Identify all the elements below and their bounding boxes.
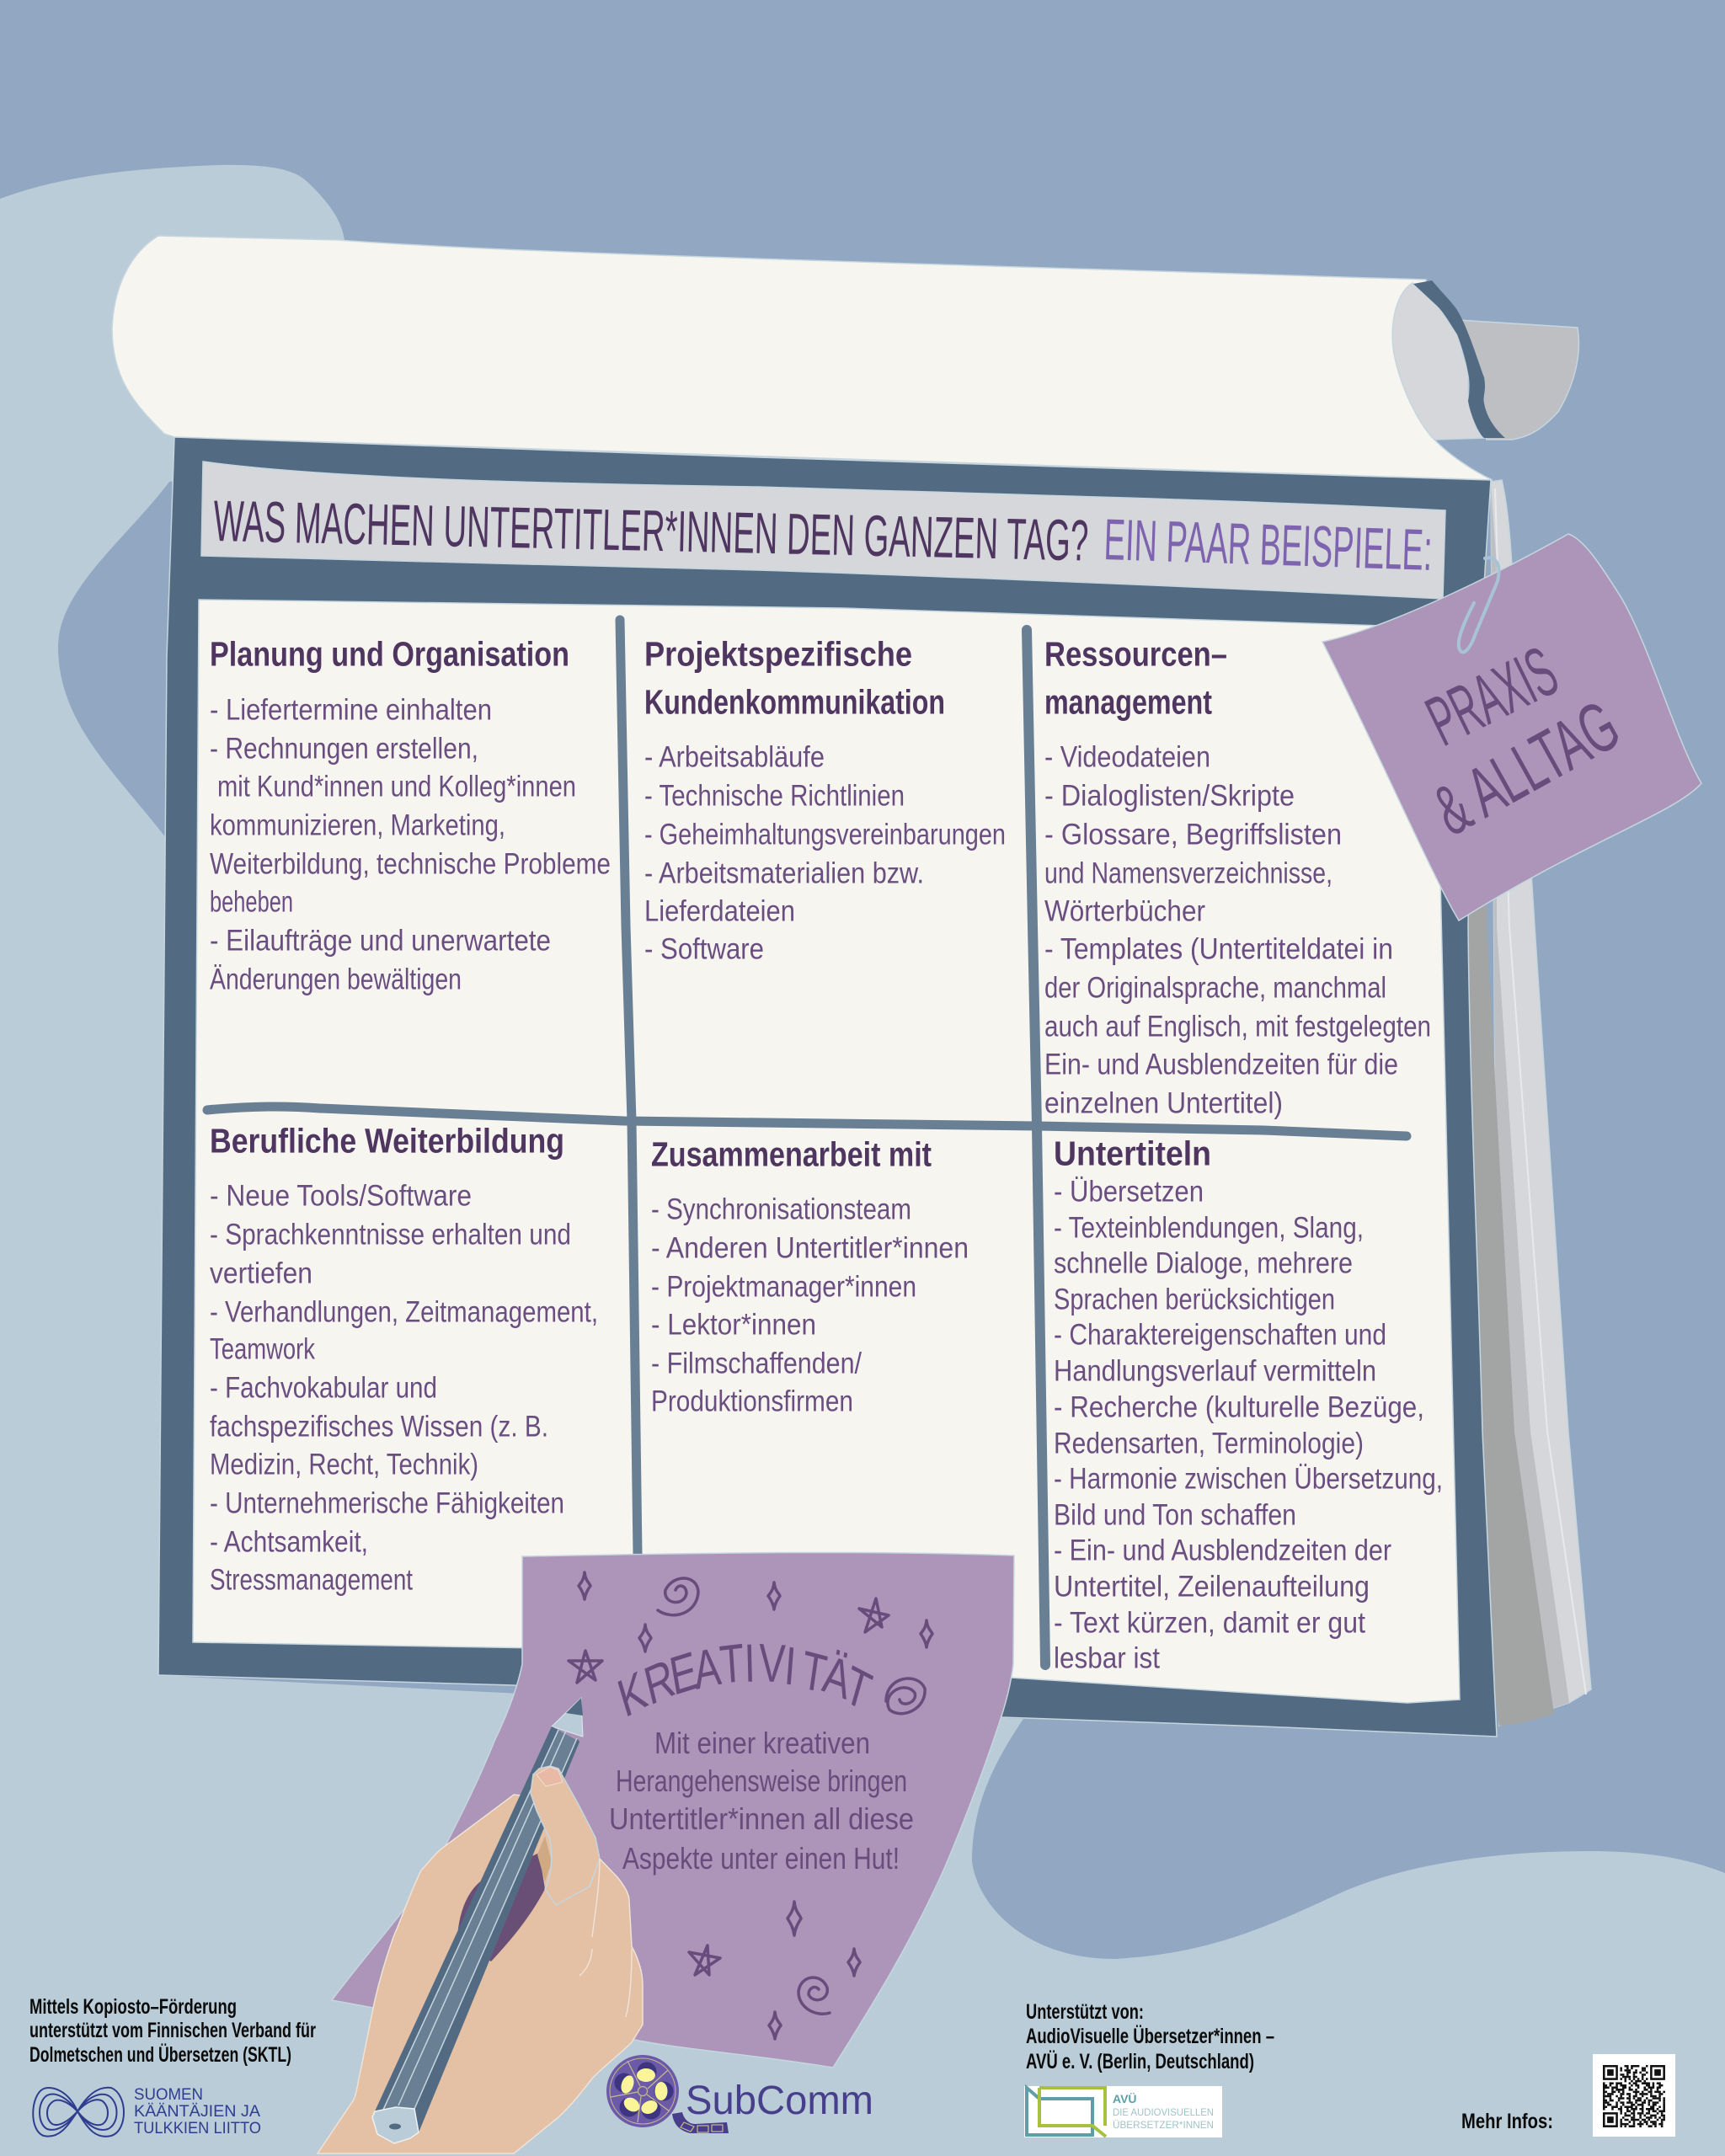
panel: Berufliche Weiterbildung: - Neue Tools/Software xyxy=(210,1179,472,1213)
panel: Zusammenarbeit mit: - Anderen Untertitler*innen xyxy=(651,1231,969,1265)
panel: Ressourcenmanagement: und Namensverzeichnisse, xyxy=(1044,857,1332,889)
panel: Berufliche Weiterbildung: vertiefen xyxy=(210,1257,312,1290)
footer: support note: AudioVisuelle Übersetzer*innen – xyxy=(1026,2024,1274,2048)
panel: Projektspezifische Kundenkommunikation: - Software xyxy=(644,933,764,965)
logo: AVÜ: DIE AUDIOVISUELLEN xyxy=(1113,2106,1214,2118)
illustration: hand with pencil xyxy=(318,1698,643,2153)
thumb xyxy=(531,1766,600,1905)
footer: support note xyxy=(1026,2000,1274,2073)
panel: Untertiteln: schnelle Dialoge, mehrere xyxy=(1054,1246,1353,1280)
panel: Untertiteln: - Harmonie zwischen Übersetzung, xyxy=(1054,1462,1443,1496)
skin shadow xyxy=(537,1836,552,1881)
panel: Untertiteln: Redensarten, Terminologie) xyxy=(1054,1427,1364,1460)
panel: Untertiteln: - Ein- und Ausblendzeiten der xyxy=(1054,1534,1391,1566)
panel: Zusammenarbeit mit: - Lektor*innen xyxy=(651,1309,816,1341)
panel: Projektspezifische Kundenkommunikation: Projektspezifische xyxy=(644,635,912,674)
note text: Aspekte unter einen Hut! xyxy=(622,1841,900,1876)
sticky note: Praxis und Alltag xyxy=(1322,534,1701,921)
footer: support note: AVÜ e. V. (Berlin, Deutschland) xyxy=(1026,2049,1254,2073)
panel: Berufliche Weiterbildung: - Sprachkenntnisse erhalten und xyxy=(210,1218,571,1251)
panel: Ressourcenmanagement: der Originalsprache, manchmal xyxy=(1044,972,1386,1004)
panel: Ressourcenmanagement: - Dialoglisten/Skripte xyxy=(1044,780,1295,812)
panel: Berufliche Weiterbildung: Stressmanagement xyxy=(210,1563,413,1597)
footer: funding note: unterstützt vom Finnischen Verband für xyxy=(29,2019,316,2042)
panel: Planung und Organisation xyxy=(210,635,611,995)
panel: Untertiteln: Sprachen berücksichtigen xyxy=(1054,1283,1335,1315)
hand xyxy=(318,1795,643,2153)
panel: Zusammenarbeit mit: - Projektmanager*innen xyxy=(651,1270,916,1304)
panel: Planung und Organisation: kommunizieren, Marketing, xyxy=(210,808,505,842)
panel: Planung und Organisation: - Rechnungen erstellen, xyxy=(210,733,478,765)
icon: infinity knot xyxy=(33,2088,124,2137)
inner page xyxy=(193,600,1460,1703)
panel: Berufliche Weiterbildung: - Achtsamkeit, xyxy=(210,1526,368,1558)
panel: Planung und Organisation: beheben xyxy=(210,886,293,918)
panel: Projektspezifische Kundenkommunikation xyxy=(644,635,1006,965)
logo: SubComm xyxy=(606,2055,873,2133)
roll band xyxy=(1413,280,1505,438)
panel: Zusammenarbeit mit: Produktionsfirmen xyxy=(651,1385,853,1418)
note text: Untertitler*innen all diese xyxy=(609,1801,914,1836)
heading: Kreativität arc: KREATIVITÄT xyxy=(611,1632,878,1729)
panel: Planung und Organisation: mit Kund*innen und Kolleg*innen xyxy=(217,770,576,803)
panel: Projektspezifische Kundenkommunikation: Lieferdateien xyxy=(644,894,795,928)
panel: Zusammenarbeit mit: - Synchronisationsteam xyxy=(651,1193,911,1226)
panel: Ressourcenmanagement: Ein- und Ausblendzeiten für die xyxy=(1044,1048,1398,1081)
sticky note text xyxy=(1415,631,1632,851)
panel: Projektspezifische Kundenkommunikation: - Technische Richtlinien xyxy=(644,780,905,812)
panel: Berufliche Weiterbildung: Berufliche Weiterbildung xyxy=(210,1122,564,1161)
icon: doodles xyxy=(569,1572,932,2039)
finger gap xyxy=(457,1853,545,1961)
paper roll xyxy=(112,236,1578,480)
panel: Ressourcenmanagement: Ressourcen– xyxy=(1044,635,1227,674)
footer: support note: Unterstützt von: xyxy=(1026,2000,1144,2024)
panel: Berufliche Weiterbildung: fachspezifisches Wissen (z. B. xyxy=(210,1410,548,1444)
footer: funding note: Mittels Kopiosto–Förderung xyxy=(29,1995,237,2019)
panel: Untertiteln: - Übersetzen xyxy=(1054,1176,1204,1208)
logo: AVÜ xyxy=(1024,2086,1222,2137)
thumbnail xyxy=(537,1767,563,1786)
panel: Ressourcenmanagement: einzelnen Untertitel) xyxy=(1044,1086,1283,1120)
roll cone xyxy=(1459,320,1578,440)
QR code xyxy=(1593,2054,1675,2137)
panel: Projektspezifische Kundenkommunikation: Kundenkommunikation xyxy=(644,682,945,721)
logo: SKTL: KÄÄNTÄJIEN JA xyxy=(134,2103,260,2121)
icon: paperclip xyxy=(1459,558,1499,653)
pencil xyxy=(372,1698,583,2143)
panel: Ressourcenmanagement: Wörterbücher xyxy=(1044,894,1205,928)
panel: Berufliche Weiterbildung xyxy=(210,1122,598,1597)
panel: Zusammenarbeit mit: - Filmschaffenden/ xyxy=(651,1348,862,1380)
panel: Ressourcenmanagement: - Templates (Untertiteldatei in xyxy=(1044,933,1393,965)
panel: Ressourcenmanagement: - Videodateien xyxy=(1044,741,1210,773)
panel: Planung und Organisation: - Eilaufträge und unerwartete xyxy=(210,925,551,957)
panel: Zusammenarbeit mit: Zusammenarbeit mit xyxy=(651,1135,932,1174)
panel: Berufliche Weiterbildung: - Fachvokabular und xyxy=(210,1371,437,1405)
icon: film strip xyxy=(672,2112,729,2133)
panel: Berufliche Weiterbildung: - Verhandlungen, Zeitmanagement, xyxy=(210,1295,598,1329)
panel: Planung und Organisation: - Liefertermine einhalten xyxy=(210,694,492,726)
notebook back pages xyxy=(1432,480,1591,1726)
notebook frame xyxy=(158,437,1497,1737)
hand creases xyxy=(579,1859,632,2017)
panel: Planung und Organisation: Weiterbildung, technische Probleme xyxy=(210,847,611,881)
title accent text: EIN PAAR BEISPIELE: xyxy=(1103,507,1434,583)
logo: SubComm: SubComm xyxy=(686,2079,873,2123)
logo: SKTL xyxy=(33,2086,261,2137)
panel: Planung und Organisation: Änderungen bewältigen xyxy=(210,963,462,995)
logo: SKTL: SUOMEN xyxy=(134,2086,203,2104)
icon: film reel xyxy=(606,2055,679,2127)
panel: Untertiteln: - Texteinblendungen, Slang, xyxy=(1054,1211,1364,1245)
note: Kreativität xyxy=(332,1552,1014,2068)
panel: Ressourcenmanagement xyxy=(1044,635,1431,1120)
panel: Untertiteln: lesbar ist xyxy=(1054,1642,1160,1674)
rolled sheet xyxy=(112,236,1493,480)
sticky note text: PRAXIS xyxy=(1415,631,1569,760)
panel: Untertiteln: Handlungsverlauf vermitteln xyxy=(1054,1354,1376,1388)
panel: Berufliche Weiterbildung: - Unternehmerische Fähigkeiten xyxy=(210,1487,564,1519)
label: Mehr Infos: Mehr Infos: xyxy=(1461,2110,1553,2133)
panel: Untertiteln: Untertitel, Zeilenaufteilung xyxy=(1054,1570,1370,1604)
footer: funding note xyxy=(29,1995,316,2067)
logo: AVÜ: ÜBERSETZER*INNEN xyxy=(1113,2119,1214,2131)
note text xyxy=(609,1726,914,1876)
panel: Projektspezifische Kundenkommunikation: - Geheimhaltungsvereinbarungen xyxy=(644,819,1006,851)
panel: Ressourcenmanagement: auch auf Englisch, mit festgelegten xyxy=(1044,1011,1431,1043)
panel: Untertiteln xyxy=(1054,1134,1443,1674)
title banner xyxy=(201,462,1445,599)
logo: AVÜ: AVÜ xyxy=(1113,2092,1137,2105)
panel: Untertiteln: - Charaktereigenschaften und xyxy=(1054,1319,1386,1351)
grid lines xyxy=(207,620,1407,1665)
panel: Untertiteln: Untertiteln xyxy=(1054,1134,1211,1172)
footer: funding note: Dolmetschen und Übersetzen (SKTL) xyxy=(29,2042,291,2067)
panel: Planung und Organisation: Planung und Organisation xyxy=(210,635,569,674)
note text: Mit einer kreativen xyxy=(654,1726,870,1760)
note text: Herangehensweise bringen xyxy=(616,1764,907,1798)
roll end xyxy=(1392,283,1484,440)
panel: Untertiteln: - Recherche (kulturelle Bezüge, xyxy=(1054,1391,1424,1423)
panel: Projektspezifische Kundenkommunikation: - Arbeitsabläufe xyxy=(644,741,825,773)
panel: Untertiteln: Bild und Ton schaffen xyxy=(1054,1499,1296,1531)
panel: Projektspezifische Kundenkommunikation: - Arbeitsmaterialien bzw. xyxy=(644,857,924,889)
panel: Zusammenarbeit mit xyxy=(651,1135,969,1418)
panel: Ressourcenmanagement: - Glossare, Begriffslisten xyxy=(1044,819,1342,851)
logo: SKTL: TULKKIEN LIITTO xyxy=(134,2120,261,2137)
panel: Ressourcenmanagement: management xyxy=(1044,682,1212,721)
panel: Untertiteln: - Text kürzen, damit er gut xyxy=(1054,1607,1365,1639)
panel: Berufliche Weiterbildung: Medizin, Recht, Technik) xyxy=(210,1449,478,1481)
panel: Berufliche Weiterbildung: Teamwork xyxy=(210,1332,315,1366)
